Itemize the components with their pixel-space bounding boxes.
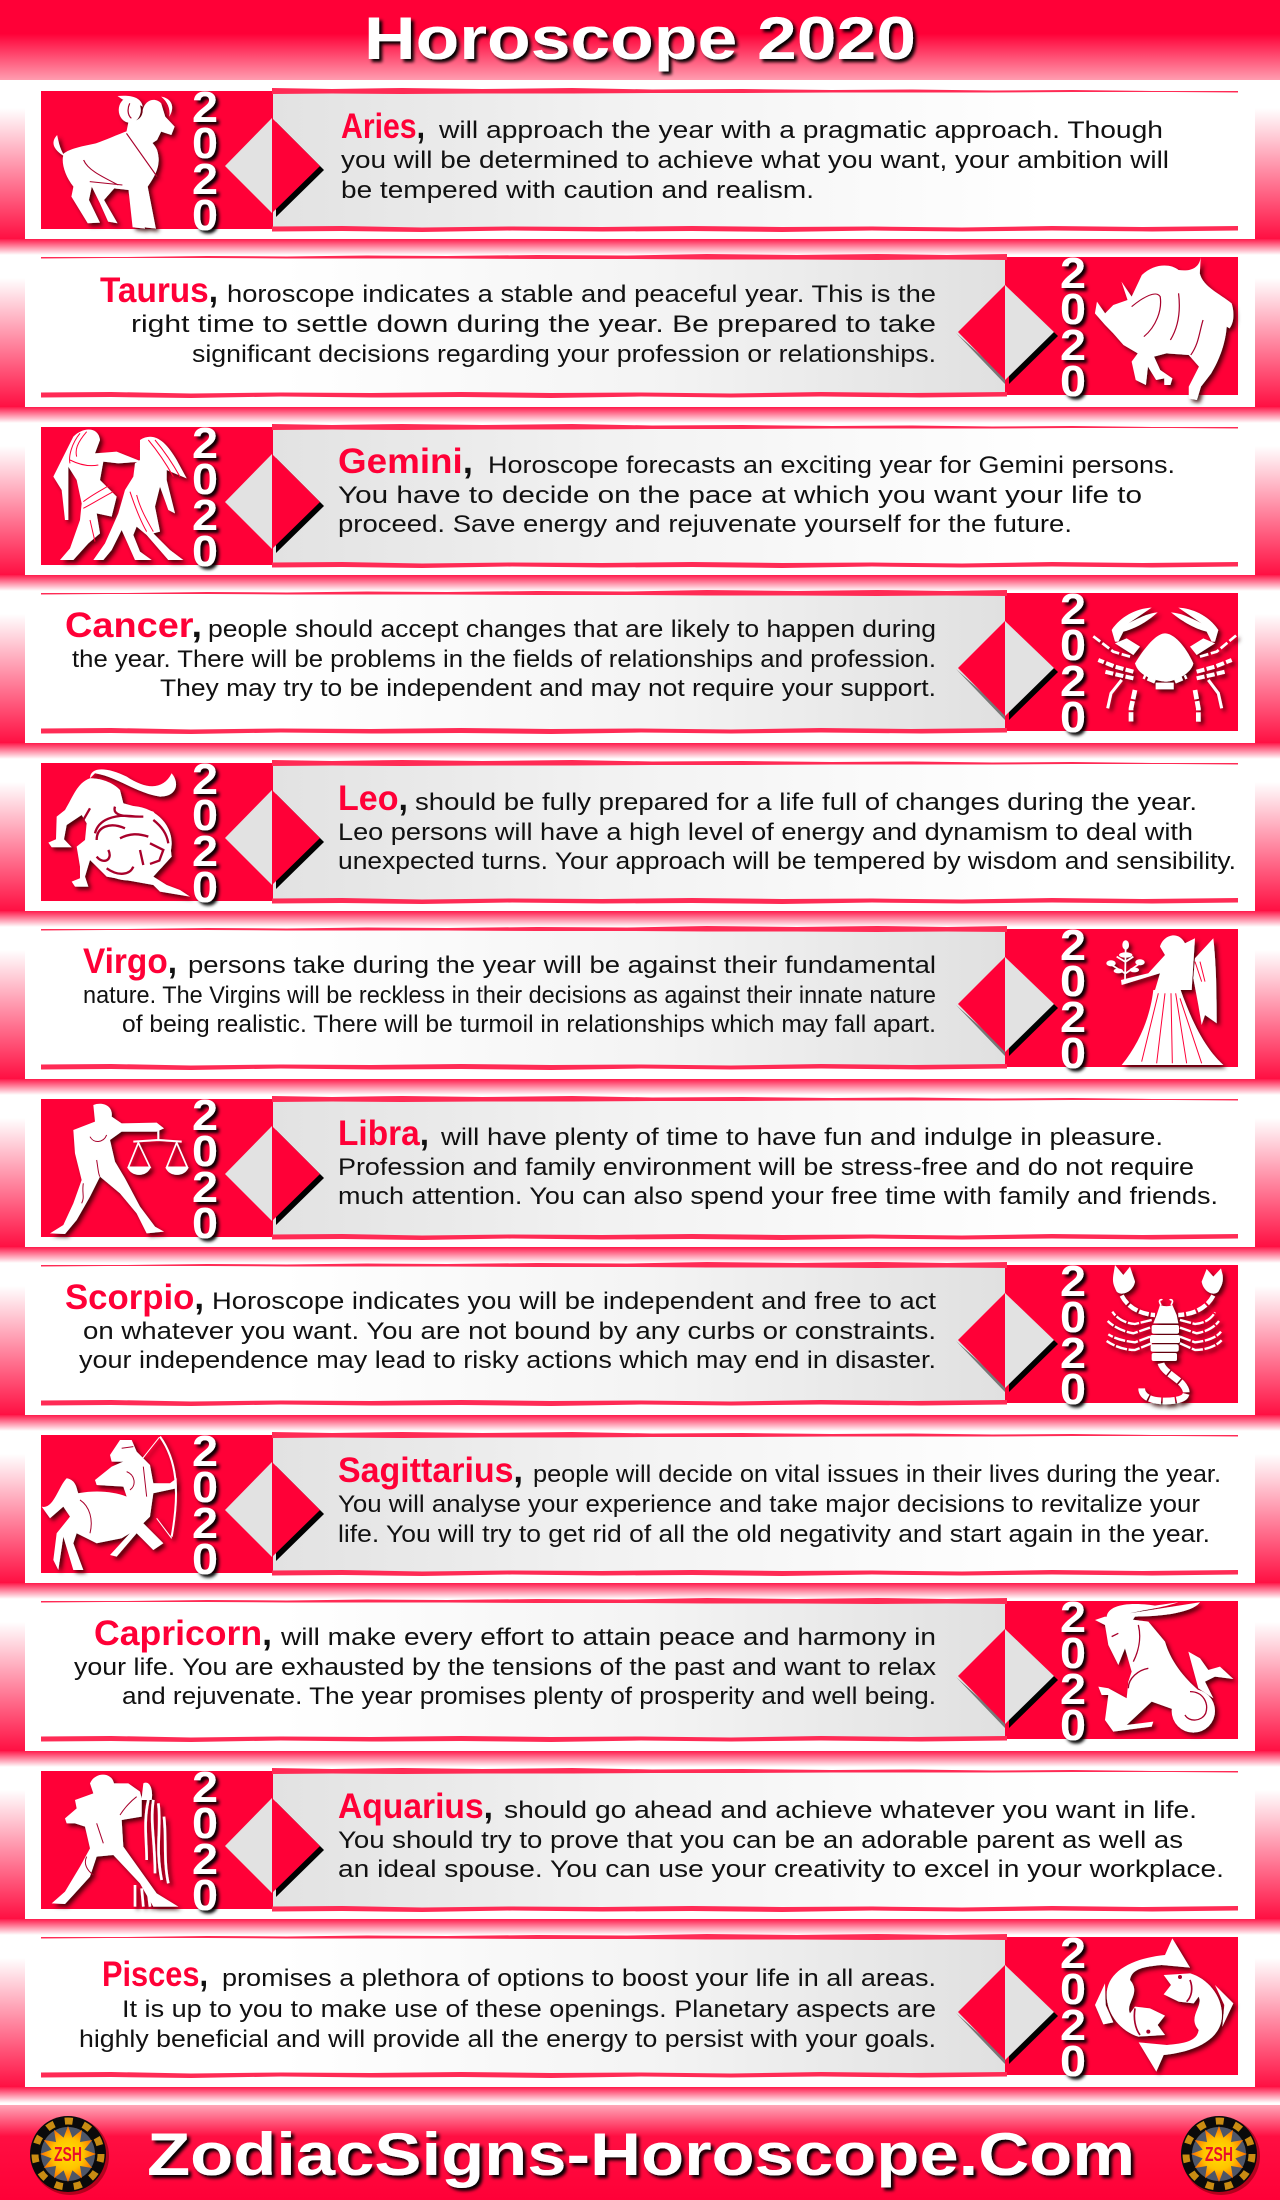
year 2020 [1060,1929,1086,2086]
text: Capricorn: will make every effort to attain peace and harmony in [280,1624,936,1651]
icon: man with scales [50,1104,189,1234]
text: Leo: should be fully prepared for a life full of changes during the year. [415,789,1197,816]
year 2020: 2 [1060,1593,1086,1642]
text background [272,92,1238,228]
torn bottom line [272,1906,1238,1912]
red block [41,427,273,565]
year 2020: 2 [192,419,218,468]
torn bottom line [272,1570,1238,1576]
arrow diamond [225,790,324,889]
torn bottom line [41,392,1007,398]
text: Libra [338,1114,1218,1210]
torn bottom line [41,728,1007,734]
text: Libra: Profession and family environment will be stress-free and do not require [338,1154,1194,1181]
text: Sagittarius: Sagittarius, [338,1451,523,1490]
arrow diamond [956,1965,1058,2064]
text: Aries: you will be determined to achieve what you want, your ambition will [341,147,1169,174]
torn top line [41,926,1007,932]
text: Capricorn: your life. You are exhausted by the tensions of the past and want to relax [74,1654,936,1681]
panel: Gemini [41,419,1238,576]
torn top line [272,1096,1238,1102]
icon: crab [1092,608,1237,722]
torn bottom line [272,562,1238,568]
torn top line [41,1262,1007,1268]
year 2020: 2 [192,1163,218,1212]
year 2020: 0 [192,791,218,840]
year 2020: 2 [1060,921,1086,970]
arrow diamond [225,118,324,217]
icon: lion [48,769,190,897]
icon: sea goat [1095,1602,1233,1733]
header banner [0,0,1280,80]
text: Aries [341,107,1169,204]
year 2020: 2 [192,755,218,804]
year 2020 [192,755,218,912]
text: Pisces: It is up to you to make use of these openings. Planetary aspects are [122,1996,936,2023]
text: Pisces [79,1955,936,2053]
year 2020 [192,83,218,240]
panel: Taurus [41,249,1238,406]
year 2020: 2 [192,1427,218,1476]
text: Virgo: persons take during the year will be against their fundamental [188,952,936,979]
torn bottom line [272,226,1238,232]
torn top line [41,1598,1007,1604]
icon: left emblem: ZSH [54,2144,82,2166]
text: Sagittarius: life. You will try to get rid of all the old negativity and start again in the year. [338,1521,1210,1548]
panel: Capricorn [41,1593,1238,1750]
text: Cancer: Cancer , [65,606,202,645]
text: Gemini [338,442,1175,538]
text background [272,1436,1238,1572]
icon: left emblem [30,2116,109,2195]
year 2020 [192,1091,218,1248]
text: Scorpio: Scorpio, [65,1278,204,1317]
red block [41,1435,273,1573]
text: Virgo: nature. The Virgins will be reckless in their decisions as against their innate nature [83,982,936,1009]
year 2020: 2 [1060,993,1086,1042]
year 2020: 2 [1060,249,1086,298]
panel: Virgo [41,921,1238,1078]
torn bottom line [41,1736,1007,1742]
year 2020: 0 [192,1127,218,1176]
text: Pisces: promises a plethora of options to boost your life in all areas. [222,1965,936,1992]
torn top line [272,1768,1238,1774]
arrow diamond [956,1293,1058,1392]
text: Leo: Leo, [338,779,408,818]
panel: Scorpio [41,1257,1238,1414]
year 2020: 2 [192,155,218,204]
text background [272,1772,1238,1908]
year 2020: 0 [192,1799,218,1848]
icon: centaur archer [42,1437,177,1570]
torn top line [272,760,1238,766]
text: Aries: Aries, [341,107,425,146]
year 2020: 0 [192,527,218,576]
icon: maiden [1106,935,1223,1065]
year 2020: 0 [192,863,218,912]
text: Aquarius: Aquarius, [338,1787,493,1826]
arrow diamond [225,1462,324,1561]
text: Sagittarius: You will analyse your experience and take major decisions to revitalize your [338,1491,1200,1518]
red block [1005,1937,1238,2075]
text: Leo [338,779,1236,875]
text: Libra: will have plenty of time to have fun and indulge in pleasure. [440,1124,1163,1151]
icon: bull [1095,253,1233,400]
year 2020 [1060,249,1086,406]
text: Cancer: They may try to be independent and may not require your support. [160,675,936,702]
year 2020: 2 [1060,321,1086,370]
text background [41,1602,1007,1738]
torn bottom line [272,898,1238,904]
year 2020: 2 [192,83,218,132]
text: Leo: Leo persons will have a high level of energy and dynamism to deal with [338,819,1193,846]
arrow diamond [225,1798,324,1897]
text: Taurus: Taurus, [100,271,218,310]
text: Taurus: significant decisions regarding your profession or relationships. [192,341,936,368]
red block [41,1099,273,1237]
year 2020: 0 [1060,1965,1086,2014]
torn top line [41,1934,1007,1940]
title: Horoscope 2020 [364,5,916,72]
text: Cancer [65,606,936,702]
text: Aquarius: should go ahead and achieve whatever you want in life. [504,1797,1197,1824]
text: Libra: much attention. You can also spend your free time with family and friends. [338,1183,1218,1210]
footer banner [0,2105,1280,2200]
text background [272,1100,1238,1236]
text: Gemini: proceed. Save energy and rejuvenate yourself for the future. [338,511,1072,538]
red block [41,91,273,229]
text: Aquarius: an ideal spouse. You can use your creativity to excel in your workplace. [338,1856,1224,1883]
year 2020: 0 [1060,2037,1086,2086]
year 2020: 2 [192,491,218,540]
torn top line [272,1432,1238,1438]
text: Sagittarius [338,1451,1221,1548]
year 2020: 0 [1060,285,1086,334]
text: Taurus [100,271,936,368]
text: Scorpio: Horoscope indicates you will be independent and free to act [212,1288,936,1315]
year 2020: 0 [192,1463,218,1512]
text: Capricorn [74,1614,936,1710]
torn top line [41,590,1007,596]
year 2020: 2 [1060,1929,1086,1978]
text: Cancer: people should accept changes that are likely to happen during [208,616,936,643]
text: Capricorn: and rejuvenate. The year promises plenty of prosperity and well being. [122,1683,936,1710]
torn bottom line [41,1064,1007,1070]
torn bottom line [41,1400,1007,1406]
year 2020: 0 [192,1871,218,1920]
text: Aries: be tempered with caution and realism. [341,177,814,204]
text: Aquarius: You should try to prove that you can be an adorable parent as well as [338,1827,1183,1854]
panel: Aquarius [41,1763,1238,1920]
year 2020: 2 [192,1835,218,1884]
text: Gemini: You have to decide on the pace at which you want your life to [338,482,1142,509]
year 2020: 2 [1060,2001,1086,2050]
text: Aquarius [338,1787,1224,1883]
red block [1005,1265,1238,1403]
arrow diamond [956,285,1058,384]
year 2020: 2 [1060,1329,1086,1378]
red block [1005,1601,1238,1739]
text: Virgo: Virgo, [83,942,177,981]
icon: right emblem [1181,2116,1260,2195]
text: Pisces: highly beneficial and will provide all the energy to persist with your goals. [79,2026,936,2053]
text: Gemini: Gemini, [338,442,473,481]
icon: scorpion [1107,1265,1223,1401]
year 2020 [1060,921,1086,1078]
panel: Leo [41,755,1238,912]
year 2020: 0 [192,1199,218,1248]
arrow diamond [956,621,1058,720]
text: Virgo: of being realistic. There will be turmoil in relationships which may fall apart. [122,1011,936,1038]
panel: Libra [41,1091,1238,1248]
text: Taurus: right time to settle down during the year. Be prepared to take [131,311,936,338]
text: Taurus: horoscope indicates a stable and peaceful year. This is the [227,281,936,308]
year 2020: 0 [1060,1701,1086,1750]
icon: two fish [1095,1938,1233,2072]
year 2020: 0 [1060,1293,1086,1342]
red block [41,763,273,901]
year 2020 [1060,1257,1086,1414]
red block [1005,929,1238,1067]
panel: Pisces [41,1929,1238,2086]
year 2020: 2 [192,1499,218,1548]
red block [41,1771,273,1909]
year 2020: 2 [192,827,218,876]
text: Sagittarius: people will decide on vital issues in their lives during the year. [533,1461,1221,1488]
year 2020 [192,1427,218,1584]
text: Virgo [83,942,936,1038]
arrow diamond [956,1629,1058,1728]
text: Scorpio: on whatever you want. You are not bound by any curbs or constraints. [83,1318,936,1345]
text background [272,428,1238,564]
year 2020: 2 [192,1091,218,1140]
text background [41,1266,1007,1402]
torn bottom line [41,2072,1007,2078]
text: Pisces: Pisces, [102,1955,208,1994]
torn bottom line [272,1234,1238,1240]
red block [1005,593,1238,731]
year 2020: 2 [192,1763,218,1812]
arrow diamond [956,957,1058,1056]
year 2020: 0 [192,1535,218,1584]
year 2020: 2 [1060,657,1086,706]
torn top line [272,424,1238,430]
text: Cancer: the year. There will be problems in the fields of relationships and profession. [72,646,936,673]
icon: right emblem: ZSH [1205,2144,1233,2166]
text background [41,258,1007,394]
text: Scorpio: your independence may lead to risky actions which may end in disaster. [79,1347,936,1374]
year 2020: 0 [1060,957,1086,1006]
year 2020: 0 [192,119,218,168]
year 2020: 0 [192,455,218,504]
year 2020: 2 [1060,585,1086,634]
footer url: ZodiacSigns-Horoscope.Com [147,2121,1135,2188]
text background [41,594,1007,730]
text: Gemini: Horoscope forecasts an exciting year for Gemini persons. [488,452,1175,479]
year 2020: 2 [1060,1257,1086,1306]
text: Leo: unexpected turns. Your approach will be tempered by wisdom and sensibility. [338,848,1236,875]
text background [41,930,1007,1066]
torn top line [272,88,1238,94]
year 2020: 0 [1060,621,1086,670]
icon: water bearer [52,1775,178,1907]
year 2020: 0 [1060,1365,1086,1414]
year 2020: 0 [192,191,218,240]
text background [41,1938,1007,2074]
year 2020 [192,419,218,576]
icon: ram [53,96,175,229]
red block [1005,257,1238,395]
year 2020: 0 [1060,1629,1086,1678]
arrow diamond [225,454,324,553]
year 2020: 0 [1060,693,1086,742]
torn top line [41,254,1007,260]
text: Scorpio [65,1278,936,1374]
year 2020: 0 [1060,1029,1086,1078]
icon: twins [53,430,187,560]
arrow diamond [225,1126,324,1225]
text: Capricorn: Capricorn, [94,1614,272,1653]
year 2020 [192,1763,218,1920]
year 2020 [1060,585,1086,742]
year 2020: 2 [1060,1665,1086,1714]
text: Aries: will approach the year with a pragmatic approach. Though [438,117,1163,144]
panel: Aries [41,83,1238,240]
panel: Sagittarius [41,1427,1238,1584]
text background [272,764,1238,900]
year 2020 [1060,1593,1086,1750]
panel: Cancer [41,585,1238,742]
year 2020: 0 [1060,357,1086,406]
text: Libra: Libra, [338,1114,429,1153]
